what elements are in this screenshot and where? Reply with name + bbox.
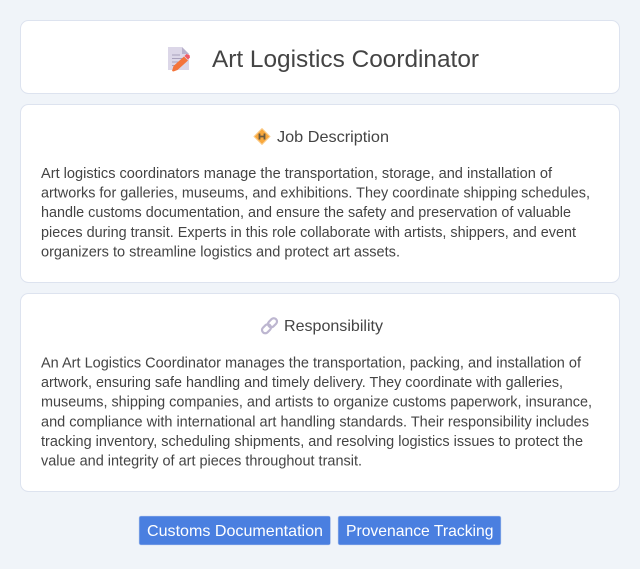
text block: job description: artworks for galleries, museums, and exhibitions. They coordinate shipping schedules,	[41, 186, 590, 202]
text block: responsibility: tracking inventory, scheduling shipments, and resolving logistics issues to protect the	[41, 434, 583, 450]
panel: responsibility	[20, 294, 620, 492]
text block: responsibility: An Art Logistics Coordinator manages the transportation, packing, and installation of	[41, 356, 582, 372]
text block: job description: organizers to streamline logistics and protect art assets.	[41, 244, 400, 260]
text block: responsibility: and compliance with international art handling standards. Their responsibility includes	[41, 414, 589, 430]
tag: customs documentation	[139, 516, 330, 545]
text block: responsibility: artwork, ensuring safe handling and timely delivery. They coordinate with galleries,	[41, 375, 563, 391]
tag: provenance tracking	[338, 516, 501, 545]
text block: responsibility	[41, 356, 592, 470]
heading: job description: Job Description	[277, 129, 389, 146]
heading: title: Art Logistics Coordinator	[212, 46, 479, 73]
text block: job description: handle customs documentation, and ensure the safety and preservation of valuable	[41, 205, 571, 221]
text block: job description: Art logistics coordinators manage the transportation, storage, and installation of	[41, 166, 553, 182]
panel: job description	[20, 104, 620, 282]
text block: responsibility: value and integrity of art pieces throughout transit.	[41, 454, 362, 470]
heading: responsibility: Responsibility	[284, 318, 383, 335]
icon: warning diamond	[254, 128, 270, 144]
panel: title	[20, 20, 620, 94]
icon: chain link	[261, 317, 278, 335]
tag: customs documentation: Customs Documentation	[147, 523, 323, 540]
text block: job description: pieces during transit. Experts in this role collaborate with artists, shippers, and event	[41, 225, 576, 241]
text block: job description	[41, 166, 590, 260]
icon: document with pencil	[168, 47, 190, 72]
tag: provenance tracking: Provenance Tracking	[346, 523, 494, 540]
text block: responsibility: museums, shipping companies, and artists to organize customs paperwork, insurance,	[41, 395, 592, 411]
